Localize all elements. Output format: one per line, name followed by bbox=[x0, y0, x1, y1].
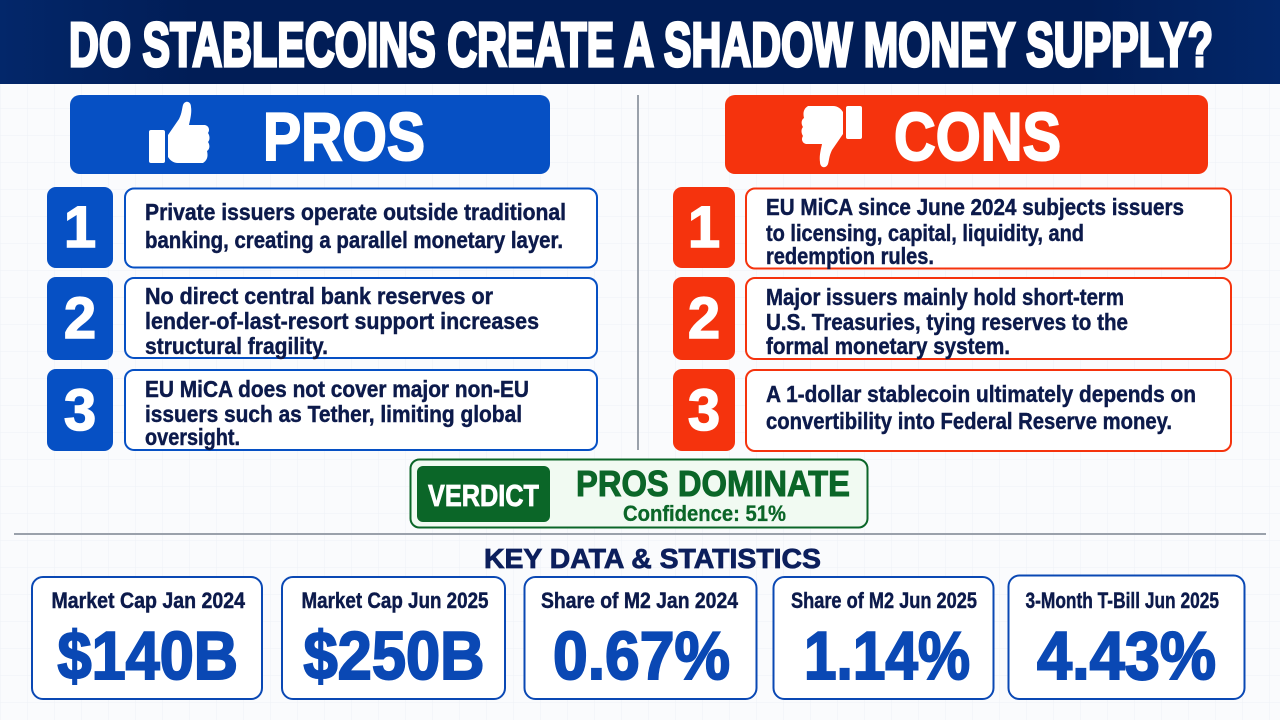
pro item 3: issuers such as Tether, limiting global bbox=[145, 401, 522, 427]
pro item 3: EU MiCA does not cover major non-EU bbox=[145, 376, 529, 402]
con item 1: EU MiCA since June 2024 subjects issuers bbox=[766, 194, 1184, 220]
stat card: share of M2 Jun 2025 bbox=[774, 577, 994, 699]
stat card: market cap Jun 2025: $250B bbox=[304, 618, 484, 694]
stat card: share of M2 Jan 2024: 0.67% bbox=[553, 618, 730, 694]
pro item 1 bbox=[47, 187, 597, 268]
stat card: share of M2 Jan 2024 bbox=[524, 577, 756, 699]
pro item 2: No direct central bank reserves or bbox=[145, 283, 493, 309]
pro item 1: 1 bbox=[64, 195, 96, 260]
verdict panel: VERDICT bbox=[428, 478, 539, 513]
stat card: share of M2 Jun 2025: Share of M2 Jun 2025 bbox=[791, 588, 977, 613]
stat card: market cap Jan 2024: $140B bbox=[58, 618, 238, 694]
pro item 2: 2 bbox=[64, 286, 96, 351]
con item 2: 2 bbox=[688, 286, 720, 351]
con item 3 bbox=[673, 369, 1231, 451]
pro item 2 bbox=[47, 277, 597, 360]
stat card: 3-month T-bill Jun 2025: 3-Month T-Bill Jun 2025 bbox=[1026, 588, 1219, 613]
stat card: market cap Jan 2024 bbox=[32, 577, 262, 699]
con item 2: U.S. Treasuries, tying reserves to the bbox=[766, 309, 1128, 335]
verdict panel: PROS DOMINATE bbox=[576, 463, 850, 504]
panel: pros heading bbox=[70, 95, 550, 175]
stat card: 3-month T-bill Jun 2025 bbox=[1008, 576, 1244, 699]
pro item 1: Private issuers operate outside traditional bbox=[145, 199, 566, 225]
pro item 3: oversight. bbox=[145, 424, 240, 450]
stat card: market cap Jun 2025 bbox=[282, 577, 505, 699]
pro item 2: structural fragility. bbox=[145, 333, 328, 359]
con item 2: formal monetary system. bbox=[766, 333, 1010, 359]
pro item 3: 3 bbox=[64, 378, 96, 443]
key data heading: KEY DATA & STATISTICS bbox=[484, 543, 821, 574]
panel: cons heading bbox=[725, 95, 1208, 175]
verdict panel bbox=[410, 460, 868, 528]
cons heading text: CONS bbox=[894, 99, 1061, 175]
stat card: share of M2 Jan 2024: Share of M2 Jan 2024 bbox=[541, 588, 739, 613]
con item 1: redemption rules. bbox=[766, 243, 934, 269]
stat card: 3-month T-bill Jun 2025: 4.43% bbox=[1037, 618, 1216, 694]
con item 1: 1 bbox=[688, 195, 720, 260]
pro item 1: banking, creating a parallel monetary layer. bbox=[145, 227, 563, 253]
stat card: market cap Jan 2024: Market Cap Jan 2024 bbox=[52, 588, 246, 613]
con item 3: A 1-dollar stablecoin ultimately depends on bbox=[766, 381, 1196, 407]
con item 1 bbox=[673, 187, 1231, 269]
verdict panel: Confidence: 51% bbox=[623, 501, 786, 526]
stat card: market cap Jun 2025: Market Cap Jun 2025 bbox=[302, 588, 488, 613]
pro item 2: lender-of-last-resort support increases bbox=[145, 308, 539, 334]
con item 3: convertibility into Federal Reserve money. bbox=[766, 408, 1172, 434]
con item 1: to licensing, capital, liquidity, and bbox=[766, 220, 1084, 246]
icon: thumbs up bbox=[149, 102, 210, 163]
icon: thumbs down bbox=[802, 106, 862, 167]
header band with title bbox=[0, 0, 1280, 84]
con item 2: Major issuers mainly hold short-term bbox=[766, 284, 1124, 310]
con item 3: 3 bbox=[688, 378, 720, 443]
pros heading text: PROS bbox=[263, 99, 425, 175]
con item 2 bbox=[673, 277, 1231, 360]
stat card: share of M2 Jun 2025: 1.14% bbox=[804, 618, 970, 694]
pro item 3 bbox=[47, 369, 597, 451]
